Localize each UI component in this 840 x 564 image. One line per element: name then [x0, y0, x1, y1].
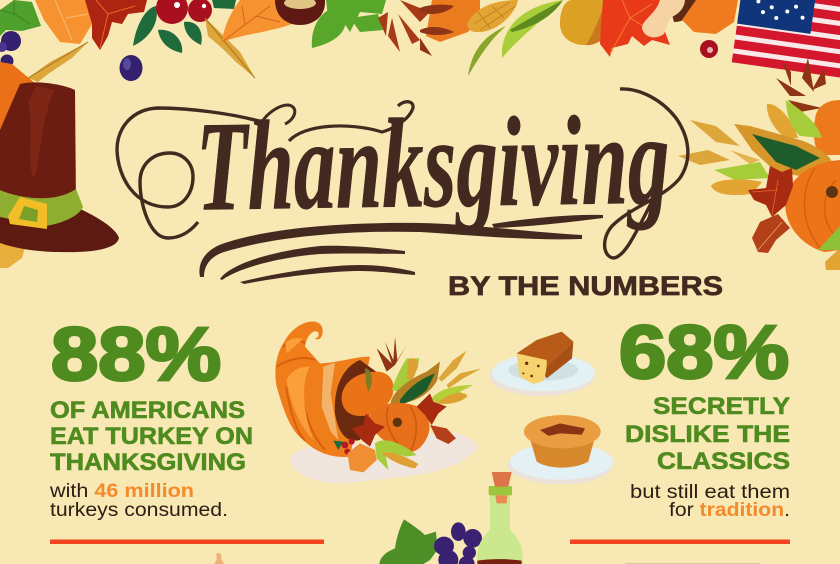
wheat — [438, 351, 481, 388]
statistic heading — [625, 393, 790, 475]
statistic note — [630, 482, 790, 521]
icon: orange pumpkin top — [814, 100, 840, 155]
icon: red maple leaf right — [600, 0, 670, 57]
flourish: end loop — [605, 89, 688, 258]
flourish: main underline swash — [199, 223, 582, 277]
grape leaf — [379, 519, 437, 564]
horn — [275, 321, 370, 457]
icon: green corn husk — [468, 0, 563, 76]
icon: dark green leaves — [133, 0, 236, 53]
icon: pear — [560, 0, 611, 45]
icon: grapes top left — [0, 31, 21, 68]
pumpkin upper — [342, 372, 394, 416]
corn bottom — [375, 440, 417, 470]
panel: left statistic — [49, 312, 253, 521]
brown leaf — [430, 425, 456, 444]
panel: right statistic — [619, 310, 790, 521]
icon: orange leaf — [35, 0, 92, 44]
flourish: short right swash — [492, 215, 603, 228]
icon: plum bottom — [120, 55, 142, 81]
icon: red berries — [156, 0, 212, 24]
corn cob — [407, 358, 418, 382]
icon: red maple leaf — [748, 166, 793, 217]
horn highlight — [285, 338, 313, 440]
flourish: second swash — [220, 246, 405, 280]
icon: cornucopia — [275, 321, 481, 483]
red maple leaf left — [352, 413, 385, 447]
statistic note: but still eat them — [630, 482, 790, 503]
divider left — [50, 540, 324, 544]
fern leaves — [377, 337, 407, 372]
statistic heading: EAT TURKEY ON — [50, 423, 253, 450]
red maple leaf right — [417, 393, 447, 425]
icon: gold buckle — [8, 197, 47, 229]
icon: corn husk — [786, 100, 822, 138]
cork — [492, 472, 512, 487]
icon: brown oak leaf — [752, 214, 790, 253]
icon: hat crown — [0, 82, 76, 205]
icon: rust fern leaves — [776, 58, 826, 112]
icon: pilgrim hat with pumpkin and wheat — [0, 42, 119, 268]
grapes — [434, 522, 482, 564]
icon: mushroom — [642, 0, 697, 37]
statistic note — [49, 481, 228, 521]
icon: wheat left — [28, 42, 88, 82]
flourish: h loop — [262, 105, 295, 124]
icon: large orange pumpkin — [785, 160, 840, 252]
statistic heading: DISLIKE THE — [625, 421, 790, 448]
text cut off at bottom right — [625, 563, 760, 564]
pie crust base — [529, 437, 595, 468]
icon: harvest cluster right — [678, 58, 840, 270]
icon: corn under hat — [0, 240, 27, 268]
horn ribs — [277, 340, 325, 450]
icon: hat brim — [0, 207, 119, 252]
icon: corn cob low — [711, 179, 762, 195]
plate — [507, 444, 613, 484]
wine — [477, 559, 522, 564]
icon: rust fern leaves — [378, 0, 430, 52]
pie filling — [540, 423, 585, 442]
statistic note: for tradition . — [669, 500, 790, 521]
icon: red berry — [700, 40, 718, 58]
icon: basil leaf left — [0, 0, 41, 38]
plate — [489, 354, 595, 396]
flourish: k arc — [289, 102, 413, 141]
icon: grapes and wine bottle — [379, 472, 523, 564]
wine bottle — [477, 495, 523, 564]
big number 88%: 88% — [51, 312, 221, 396]
icon: rust leaves on oak — [420, 5, 454, 56]
cornucopia opening — [335, 360, 383, 441]
icon: orange oak leaf — [426, 0, 480, 42]
icon: lower husk — [818, 226, 840, 250]
icon: red maple leaf — [85, 0, 147, 50]
icon: orange leaf right — [682, 0, 738, 34]
corn lower right — [431, 385, 473, 404]
icon: corn top — [767, 104, 798, 138]
cornucopia shadow — [290, 432, 477, 483]
title lettering — [117, 88, 688, 284]
icon: orange pointed leaf — [222, 0, 292, 42]
corn and husk — [392, 358, 419, 393]
icon: lower corn — [825, 248, 840, 270]
top garland of autumn leaves, berries and produce — [0, 0, 738, 81]
icon: bone tip below left divider — [214, 553, 224, 564]
icon: green hat band — [0, 189, 83, 226]
bottle neck ring — [489, 486, 512, 495]
statistic heading: CLASSICS — [657, 448, 790, 475]
large pumpkin — [368, 403, 430, 453]
green gourd — [391, 362, 440, 405]
icon: corn cob — [467, 0, 518, 32]
icon: chestnut — [275, 0, 325, 25]
icon: corn husk low — [714, 162, 770, 180]
flourish: third swash — [240, 265, 415, 284]
statistic heading — [50, 397, 253, 476]
icon: basil cluster — [312, 0, 386, 48]
subtitle: BY THE NUMBERS — [448, 271, 723, 301]
icon: green gourd — [734, 124, 832, 176]
cake slice — [517, 332, 573, 384]
icon: pumpkin behind hat — [0, 62, 36, 130]
icon: american flag — [732, 0, 840, 82]
icon: wheat stalks — [678, 120, 760, 165]
statistic note: turkeys consumed. — [50, 500, 228, 521]
statistic heading: OF AMERICANS — [50, 397, 245, 424]
statistic note: with 46 million — [49, 481, 194, 502]
pie top — [524, 415, 601, 448]
divider right — [570, 540, 790, 544]
icon: wheat top — [205, 18, 255, 78]
statistic heading: THANKSGIVING — [50, 449, 246, 476]
statistic heading: SECRETLY — [653, 393, 790, 420]
berries — [333, 439, 355, 455]
flourish: T swash — [117, 108, 262, 238]
orange leaf bottom — [347, 443, 377, 472]
icon: pie on plate — [507, 415, 613, 484]
big number 68%: 68% — [619, 310, 789, 394]
icon: cake on plate — [489, 332, 595, 396]
